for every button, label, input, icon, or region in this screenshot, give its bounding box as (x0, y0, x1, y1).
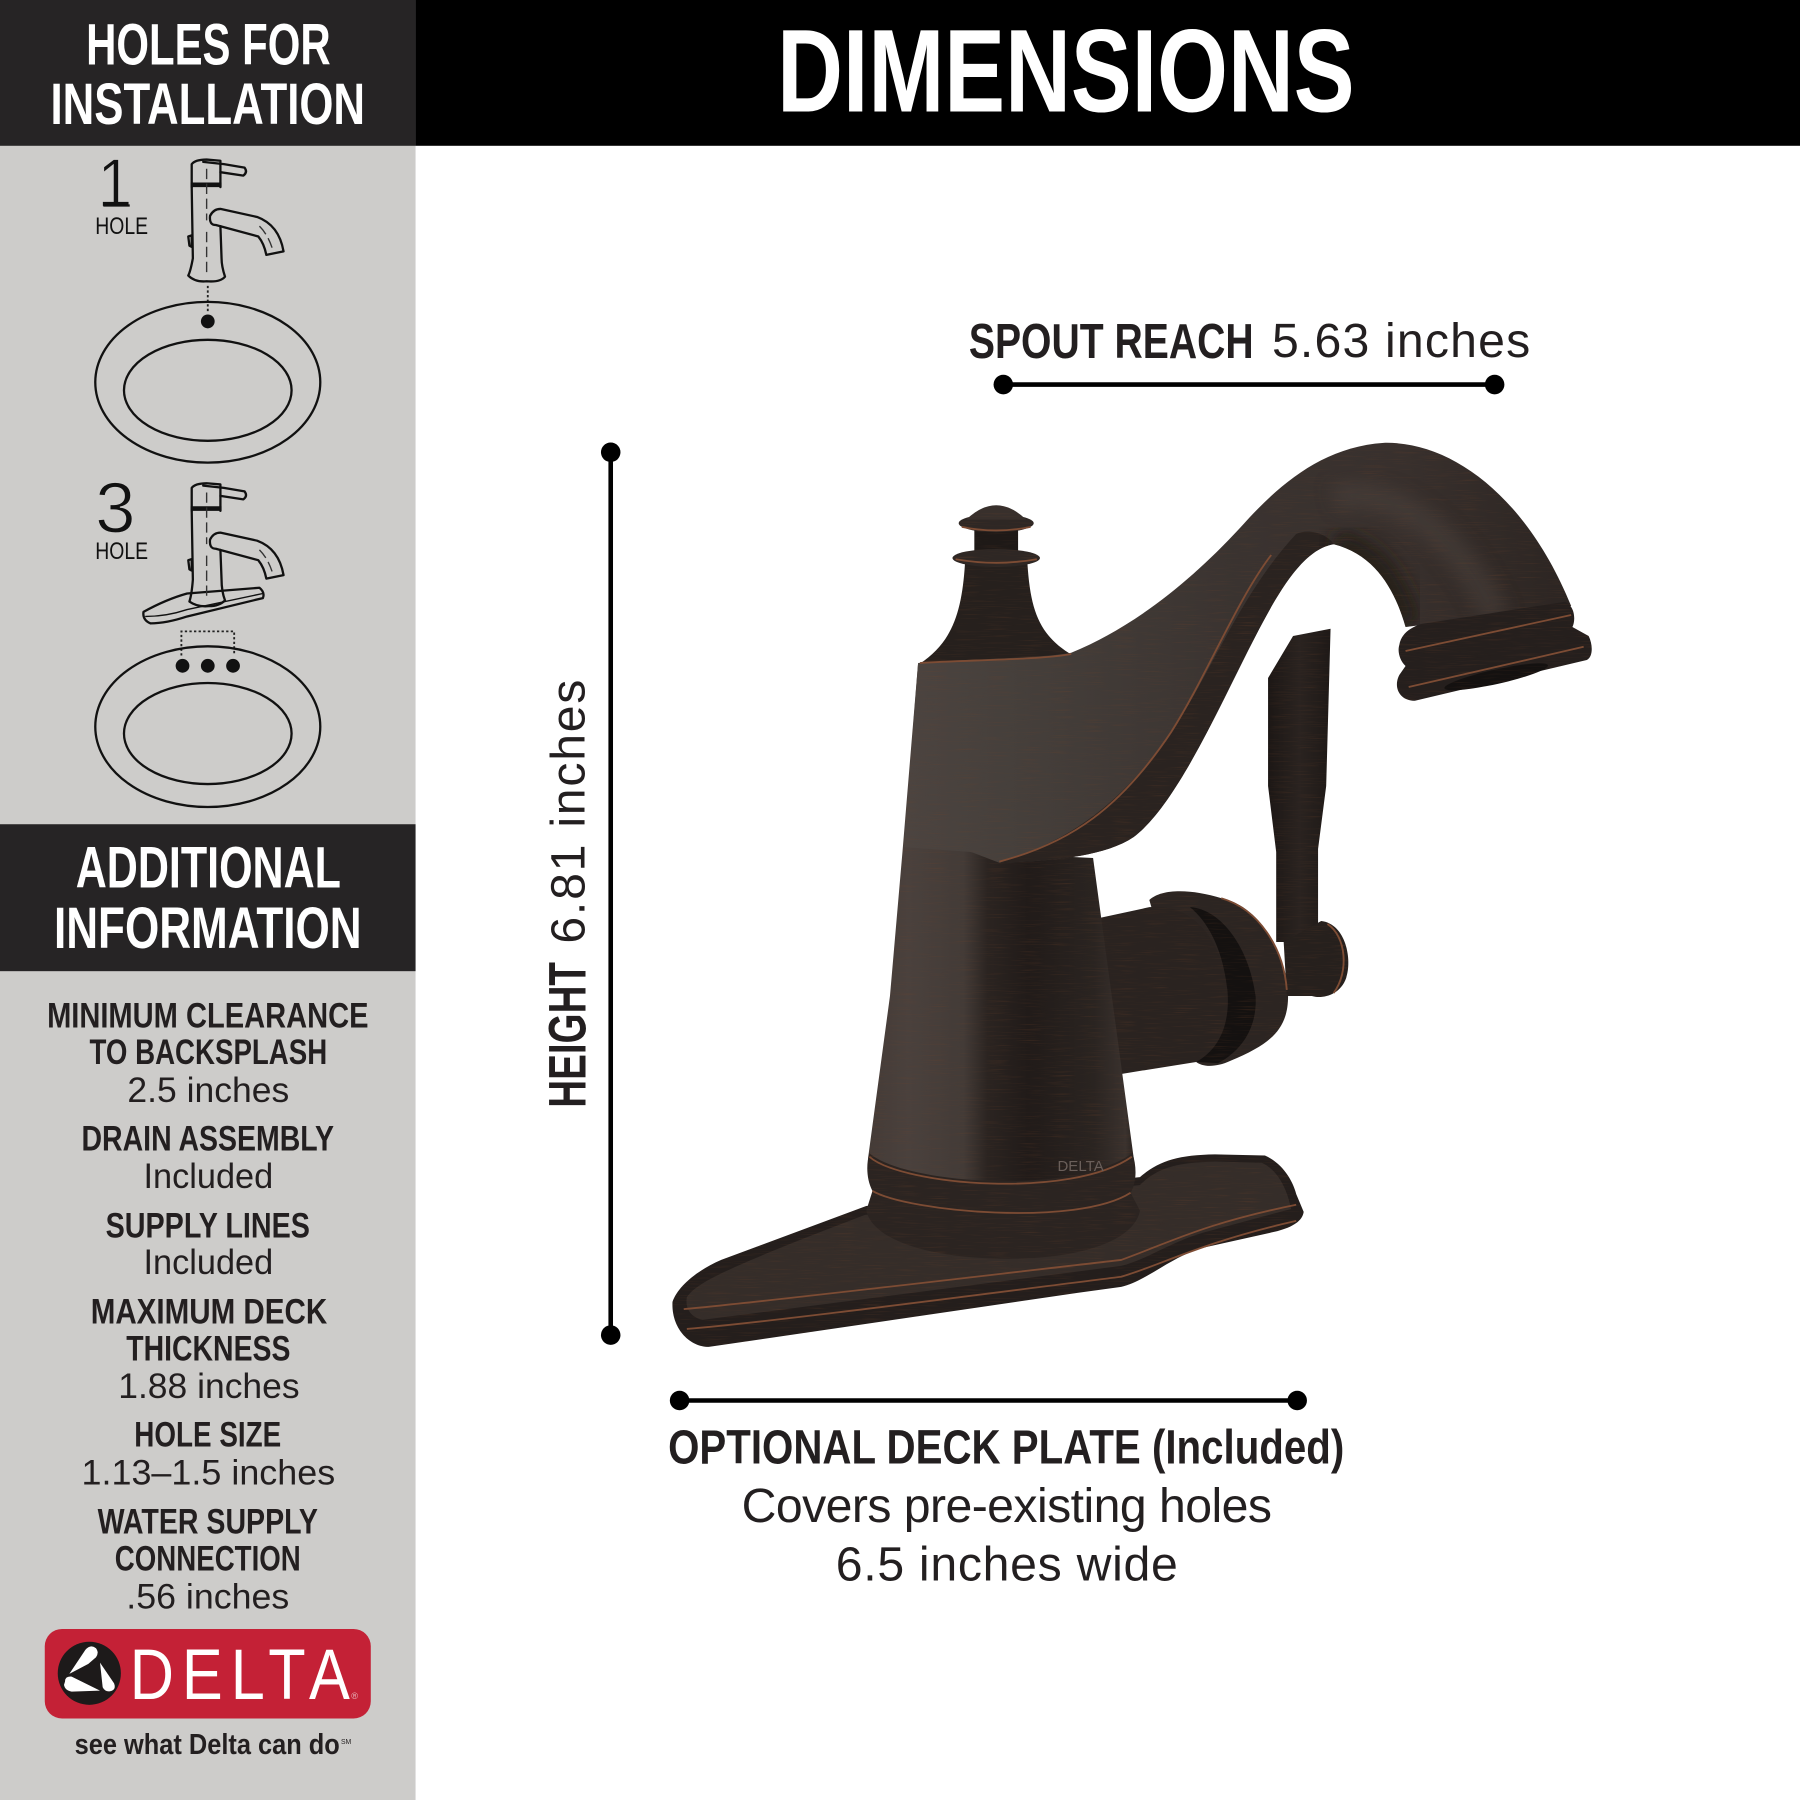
heading: additional information: ADDITIONAL (76, 835, 341, 900)
text: faucet brand mark: DELTA (1057, 1159, 1104, 1175)
handle knob (1284, 921, 1348, 997)
dimension: deck plate line (670, 1391, 1307, 1410)
product photo: faucet (672, 443, 1592, 1347)
text: water supply connection: WATER SUPPLY (98, 1502, 318, 1542)
spout arch shading (1334, 495, 1496, 627)
text: drain assembly: Included (143, 1156, 273, 1196)
text: minimum clearance (47, 995, 368, 1110)
hub flange (1149, 891, 1288, 1066)
heading bar: dimensions: DIMENSIONS (777, 5, 1355, 137)
text: optional deck plate (668, 1421, 1344, 1592)
text: drain assembly: DRAIN ASSEMBLY (82, 1118, 334, 1158)
icon: one hole installation: 1 (98, 145, 132, 222)
hub front ring (1190, 907, 1256, 1063)
logo: delta: DELTA (130, 1636, 351, 1715)
deck plate (672, 1154, 1304, 1347)
text: hole size: 1.13–1.5 inches (82, 1452, 335, 1492)
heading: holes for installation: INSTALLATION (51, 72, 365, 137)
tagline: see what Delta can do (75, 1729, 340, 1761)
heading: additional information: INFORMATION (54, 896, 362, 961)
panel: left sidebar (0, 0, 416, 1800)
dimension: spout reach: SPOUT REACH (969, 314, 1254, 369)
text: optional deck plate: Covers pre-existing holes (742, 1479, 1272, 1533)
text: supply lines (106, 1205, 310, 1282)
deck plate top surface (686, 1162, 1291, 1320)
text: hole size (82, 1414, 335, 1492)
heading: holes for installation: HOLES FOR (86, 12, 331, 77)
logo: delta (45, 1629, 371, 1718)
icon: three hole installation (95, 470, 320, 807)
hub cylinder (1099, 907, 1228, 1074)
icon: three hole installation: HOLE (95, 538, 148, 565)
spout (904, 443, 1571, 863)
dimension: height: 6.81 inches (541, 680, 595, 944)
dimension: spout reach (969, 314, 1530, 394)
spout end rings (1397, 602, 1592, 701)
text: optional deck plate: 6.5 inches wide (836, 1538, 1178, 1592)
dimension: height: HEIGHT (538, 962, 597, 1108)
text: maximum deck thickness: 1.88 inches (118, 1366, 300, 1406)
text: water supply connection (98, 1502, 318, 1616)
icon: one hole installation: HOLE (95, 213, 148, 240)
heading: additional information (0, 824, 416, 971)
logo: delta: ® (351, 1691, 358, 1701)
spout underside (999, 532, 1334, 863)
heading bar: dimensions (416, 0, 1800, 146)
neck (920, 564, 1072, 664)
copper highlights (684, 527, 1584, 1329)
icon: one hole installation (95, 145, 320, 463)
base stack rings (866, 1153, 1140, 1259)
text: water supply connection: CONNECTION (115, 1538, 301, 1578)
text: supply lines: Included (143, 1242, 273, 1282)
text: hole size: HOLE SIZE (134, 1414, 281, 1454)
lower body (868, 663, 1134, 1197)
dimension: height (538, 443, 620, 1345)
text: optional deck plate: OPTIONAL DECK PLATE (Included) (668, 1421, 1344, 1475)
text: water supply connection: .56 inches (126, 1576, 289, 1616)
text: minimum clearance: 2.5 inches (127, 1070, 289, 1110)
icon: three hole installation: 3 (95, 470, 135, 549)
dimension: spout reach: 5.63 inches (1272, 314, 1530, 368)
tagline: SM (341, 1739, 352, 1746)
lever handle (1268, 629, 1331, 942)
heading: holes for installation (0, 0, 416, 146)
text: maximum deck thickness: THICKNESS (126, 1328, 290, 1368)
text: maximum deck thickness: MAXIMUM DECK (91, 1292, 327, 1332)
text: supply lines: SUPPLY LINES (106, 1205, 310, 1245)
text: maximum deck thickness (91, 1292, 327, 1406)
text: drain assembly (82, 1118, 334, 1196)
text: minimum clearance: MINIMUM CLEARANCE (47, 995, 368, 1035)
text: minimum clearance: TO BACKSPLASH (90, 1032, 327, 1072)
